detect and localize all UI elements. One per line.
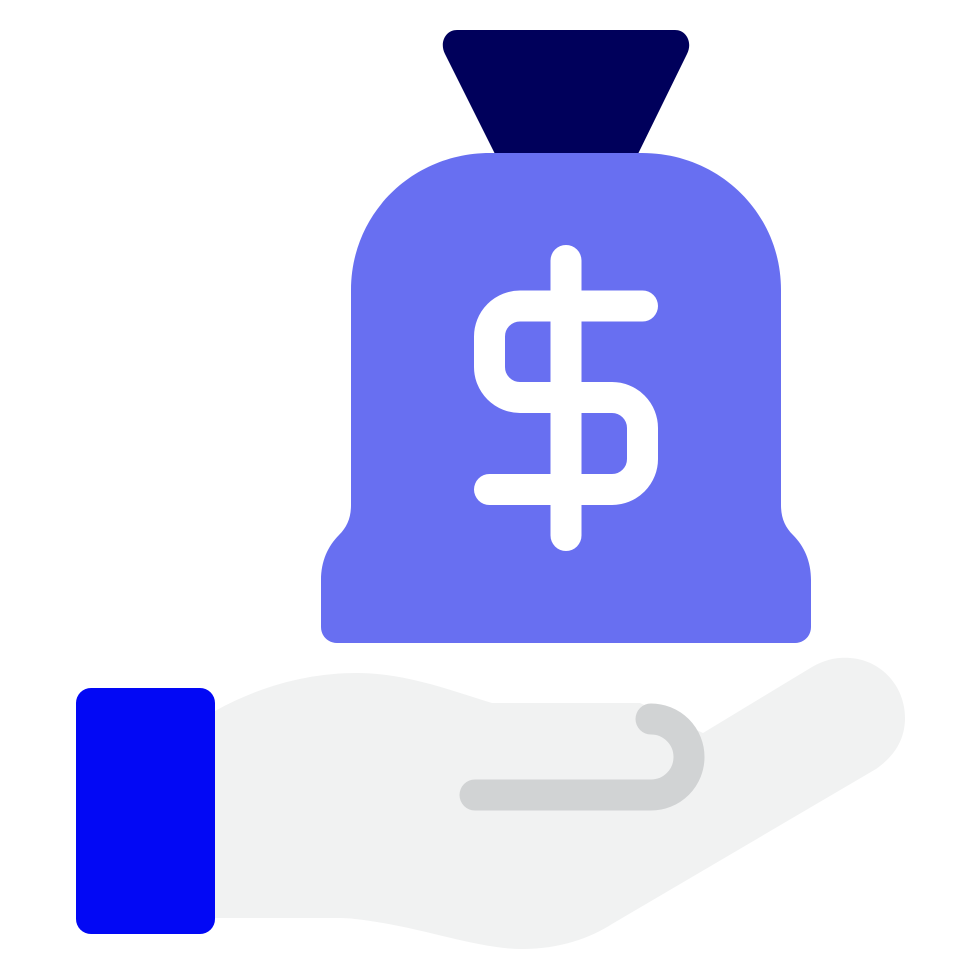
- icon: blue cuff: [76, 688, 215, 934]
- icon: money bag body: [321, 153, 811, 643]
- icon: bag neck: [443, 30, 689, 158]
- icon: dollar sign: [490, 260, 642, 536]
- icon: thumb line: [475, 719, 689, 795]
- icon: open hand: [215, 658, 905, 949]
